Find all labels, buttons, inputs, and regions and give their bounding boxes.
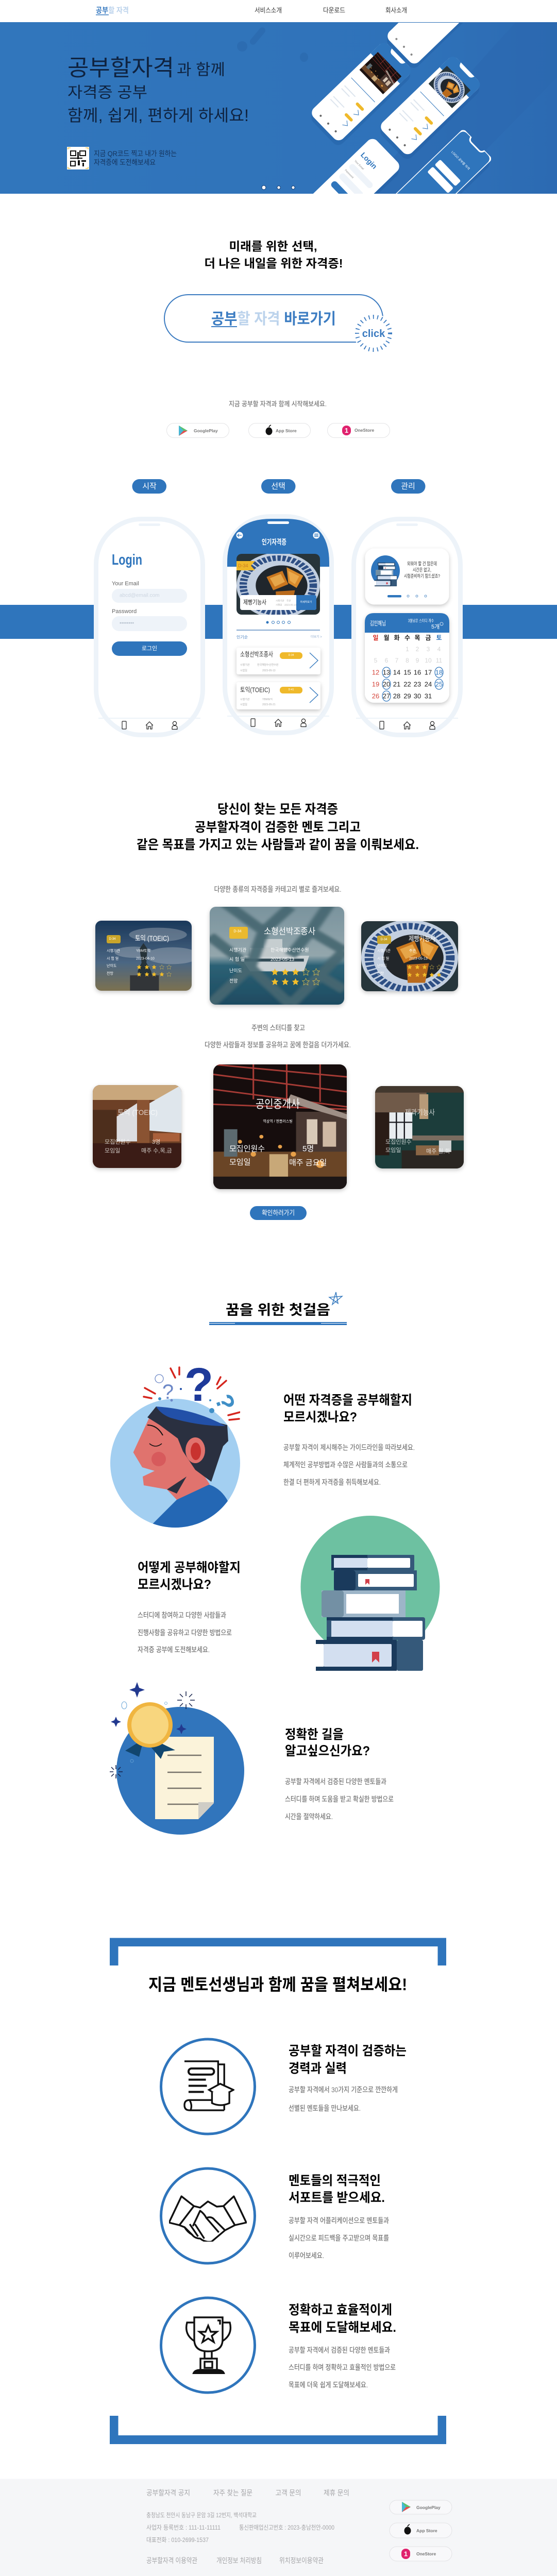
calendar card (365, 613, 449, 703)
text: verified career (289, 2044, 407, 2112)
study card: center: 매주 금요일 (289, 1158, 327, 1167)
icon: resume and cap (161, 2039, 255, 2134)
text: reach goals: 정확하고 효율적이게 (289, 2303, 392, 2317)
text: verified career: 공부할 자격에서 30가지 기준으로 깐깐하게 (289, 2086, 398, 2094)
text: reach goals: 스터디를 하며 정확하고 효율적인 방법으로 (289, 2363, 396, 2371)
store button: Google Play (167, 423, 229, 438)
button: check (250, 1206, 307, 1220)
text: right path (285, 1727, 394, 1821)
text: active support: 이루어보세요. (289, 2251, 324, 2260)
slider dots (262, 185, 295, 190)
card: small vessel operator: 시행기관 (229, 947, 246, 953)
headline: future choice (204, 240, 343, 270)
text: right path: 스터디를 하며 도움을 받고 확실한 방법으로 (285, 1795, 394, 1803)
card: small vessel operator: D-34 (233, 929, 242, 934)
button: go to service: 공부할 자격 바로가기 (211, 310, 336, 328)
text: which certificate: 체계적인 공부방법과 수많은 사람들과의 소통으로 (283, 1461, 408, 1469)
footer policy links: 위치정보이용약관 (279, 2556, 324, 2565)
card: baker: 전망 (377, 971, 384, 976)
text: which certificate: 모르시겠나요? (283, 1410, 357, 1425)
text: reach goals: 공부할 자격에서 검증된 다양한 멘토들과 (289, 2346, 390, 2354)
nav links: 회사소개 (385, 6, 407, 14)
pill labels (132, 479, 426, 494)
headline: mentors: 당신이 찾는 모든 자격증 (217, 802, 338, 817)
study card: left: 3명 (152, 1139, 160, 1145)
click badge: click (362, 328, 385, 340)
card: small vessel operator: 난이도 (229, 968, 242, 973)
store button: App Store: App Store (276, 428, 297, 433)
button: go to service (164, 295, 393, 353)
caption: categories: 다양한 종류의 자격증을 카테고리 별로 즐겨보세요. (214, 885, 341, 893)
click badge (354, 314, 393, 353)
footer store: Google Play: GooglePlay (416, 2505, 441, 2510)
icon: handshake (161, 2168, 255, 2263)
hero title: 과 함께 (177, 62, 225, 78)
study card: right (375, 1086, 464, 1168)
study card: center: 공인중개사 (256, 1097, 300, 1111)
card: TOEIC: 시 험 일 (107, 956, 119, 960)
headline: mentors: 같은 목표를 가지고 있는 사람들과 같이 꿈을 이뤄보세요. (137, 838, 419, 852)
headline: future choice: 더 나은 내일을 위한 자격증! (204, 257, 343, 270)
text: active support: 실시간으로 피드백을 주고받으며 목표를 (289, 2234, 389, 2242)
footer links: 고객 문의 (275, 2489, 301, 2497)
nav links: 다운로드 (323, 6, 345, 14)
text: how to study: 모르시겠나요? (138, 1578, 211, 1592)
pill labels: 관리 (401, 482, 415, 490)
study card: center: 모집인원수 (229, 1145, 265, 1153)
card: small vessel operator (210, 902, 344, 1005)
onboarding card (365, 548, 449, 605)
card: baker: 주관 (409, 948, 416, 953)
card: TOEIC: 전망 (107, 971, 113, 976)
headline: future choice: 미래를 위한 선택, (229, 240, 317, 253)
card: TOEIC: 토익 (TOEIC) (135, 934, 169, 942)
hero banner (0, 22, 557, 194)
text: how to study: 자격증 공부에 도전해보세요. (138, 1646, 210, 1654)
study card: right: 매주 월,화 (426, 1148, 450, 1155)
study card: left: 모임일 (105, 1147, 120, 1154)
study card: left: 모집인원수 (105, 1139, 131, 1145)
footer address: 충청남도 천안시 동남구 문암 3길 12번지, 백석대학교 (146, 2511, 257, 2519)
illustration: books on green circle (301, 1516, 440, 1671)
text: active support: 공부할 자격 어플리케이션으로 멘토들과 (289, 2216, 389, 2225)
heading: first step (209, 1292, 347, 1325)
caption: nearby studies (205, 1024, 351, 1049)
study card: right: 모집인원수 (385, 1139, 412, 1145)
text: verified career: 선별된 멘토들을 만나보세요. (289, 2104, 361, 2112)
text: active support: 멘토들의 적극적인 (289, 2174, 381, 2188)
store button: App Store (248, 423, 310, 438)
hero title (67, 56, 249, 125)
store button: OneStore: 1 (345, 427, 348, 434)
footer store: OneStore (390, 2547, 452, 2561)
text: verified career: 공부할 자격이 검증하는 (289, 2044, 407, 2058)
footer links: 공부할자격 공지 (146, 2489, 190, 2497)
study card: center: 모임일 (229, 1158, 250, 1166)
blue band behind phones (0, 605, 557, 639)
footer links: 자주 찾는 질문 (213, 2489, 252, 2497)
headline: mentors (137, 802, 419, 852)
text: right path: 정확한 길을 (285, 1727, 344, 1742)
footer store: OneStore: 1 (404, 2550, 408, 2557)
QR caption: 자격증에 도전해보세요 (94, 158, 156, 166)
card: small vessel operator: 2023-05-13 (271, 957, 294, 962)
headline: mentors: 공부할자격이 검증한 멘토 그리고 (195, 820, 361, 835)
text: active support (289, 2174, 389, 2260)
phone: study management (353, 519, 461, 735)
heading: mentor: 지금 멘토선생님과 함께 꿈을 펼쳐보세요! (148, 1975, 407, 1994)
text: how to study: 어떻게 공부해야할지 (138, 1561, 241, 1575)
text: verified career: 경력과 실력 (289, 2061, 347, 2076)
card: baker (361, 920, 458, 995)
button: check: 확인하러가기 (262, 1209, 295, 1217)
text: reach goals: 목표에 도달해보세요. (289, 2320, 396, 2335)
footer links: 제휴 문의 (324, 2489, 349, 2497)
hero title: 자격증 공부 (67, 84, 147, 101)
card: baker: 제빵기능사 (409, 935, 435, 943)
footer store: App Store: App Store (416, 2528, 437, 2533)
caption: start now: 지금 공부할 자격과 함께 시작해보세요. (229, 400, 327, 408)
card: small vessel operator: 한국해양수산연수원 (271, 947, 309, 953)
text: which certificate (283, 1393, 415, 1486)
card: small vessel operator: 소형선박조종사 (264, 926, 315, 937)
footer store: OneStore: OneStore (416, 2551, 436, 2556)
heading: first step: 꿈을 위한 첫걸음 (226, 1302, 330, 1318)
navigation bar (96, 6, 407, 15)
text: how to study: 진행사항을 공유하고 다양한 방법으로 (138, 1629, 232, 1637)
store button: Google Play: GooglePlay (194, 428, 218, 433)
study card: left: 매주 수,목,금 (141, 1147, 172, 1154)
text: right path: 알고싶으신가요? (285, 1744, 370, 1758)
study card: left (93, 1085, 181, 1168)
isometric app phones (295, 0, 495, 244)
QR caption: 지금 QR코드 찍고 내가 원하는 (94, 149, 177, 158)
card: baker: 2023-05-13 (409, 957, 428, 960)
card: baker: 난이도 (377, 963, 387, 968)
QR code (67, 147, 89, 170)
card: TOEIC: 2023-04-10 (136, 957, 155, 960)
frame: bottom bracket (110, 2416, 446, 2444)
footer policy links (146, 2556, 324, 2565)
text: reach goals: 목표에 더욱 쉽게 도달해보세요. (289, 2381, 368, 2389)
caption: nearby studies: 주변의 스터디를 찾고 (251, 1024, 305, 1032)
card: TOEIC: 난이도 (107, 963, 117, 968)
study card: left: 토익 (TOEIC) (117, 1108, 158, 1116)
logo: 공부할 자격 (96, 6, 129, 14)
card: baker: 시행기관 (377, 948, 391, 953)
study card: center: 5명 (302, 1145, 314, 1153)
text: how to study (138, 1561, 241, 1654)
footer store: App Store (390, 2523, 452, 2538)
card: TOEIC (95, 921, 199, 991)
hero title: 공부할자격 (67, 56, 174, 80)
QR caption (94, 149, 177, 166)
store button: OneStore: OneStore (355, 428, 375, 433)
study card: right: 제과기능사 (405, 1108, 435, 1116)
nav links: 서비스소개 (255, 6, 282, 14)
pill labels: 시작 (142, 482, 157, 490)
text: right path: 공부할 자격에서 검증된 다양한 멘토들과 (285, 1777, 386, 1786)
footer address: 통신판매업신고번호 : 2023-충남천안-0000 (239, 2523, 334, 2531)
frame: top bracket (110, 1938, 446, 1965)
text: which certificate: 한결 더 편하게 자격증을 취득해보세요. (283, 1478, 381, 1486)
card: small vessel operator: 시 험 일 (229, 957, 245, 962)
caption: nearby studies: 다양한 사람들과 정보를 공유하고 꿈에 한걸음 더가가세요. (205, 1041, 351, 1049)
card: TOEIC: YBM토익 (136, 949, 150, 953)
footer links (146, 2489, 349, 2497)
illustration: confused person (110, 1359, 242, 1533)
footer (0, 2479, 557, 2576)
card: small vessel operator: 전망 (229, 978, 238, 984)
illustration: certificate and medal (110, 1682, 244, 1835)
card: baker: 시 험 일 (377, 956, 389, 960)
hero decoration shapes (237, 23, 557, 194)
store button: OneStore (328, 423, 390, 438)
text: reach goals (289, 2303, 396, 2389)
card: TOEIC: 시행기관 (107, 948, 120, 953)
footer policy links: 공부할자격 이용약관 (146, 2556, 197, 2565)
text: which certificate: 어떤 자격증을 공부해할지 (283, 1393, 412, 1408)
study card: right: 모임일 (385, 1146, 401, 1154)
text: active support: 서포트를 받으세요. (289, 2191, 385, 2205)
pill labels: 선택 (271, 482, 285, 490)
phone: login (96, 519, 203, 735)
footer store: Google Play (390, 2500, 452, 2514)
text: how to study: 스터디에 참여하고 다양한 사람들과 (138, 1611, 226, 1619)
hero title: 함께, 쉽게, 편하게 하세요! (67, 106, 249, 125)
footer address: 사업자 등록번호 : 111-11-11111 (146, 2524, 221, 2531)
study card: center: 역삼역 / 엔플러스빌 (263, 1119, 293, 1123)
phone: popular certificates (225, 516, 332, 733)
footer address (146, 2511, 334, 2544)
card: TOEIC: D-34 (109, 938, 116, 941)
text: right path: 시간을 절약하세요. (285, 1812, 333, 1821)
footer policy links: 개인정보 처리방침 (216, 2556, 262, 2565)
footer address: 대표전화 : 010-2699-1537 (146, 2536, 209, 2544)
text: which certificate: 공부할 자격이 제시해주는 가이드라인을 따라보세요. (283, 1444, 415, 1452)
card: baker: D-34 (380, 938, 387, 941)
icon: trophy (161, 2298, 255, 2393)
study card: center (213, 1064, 347, 1189)
nav links (255, 6, 407, 14)
